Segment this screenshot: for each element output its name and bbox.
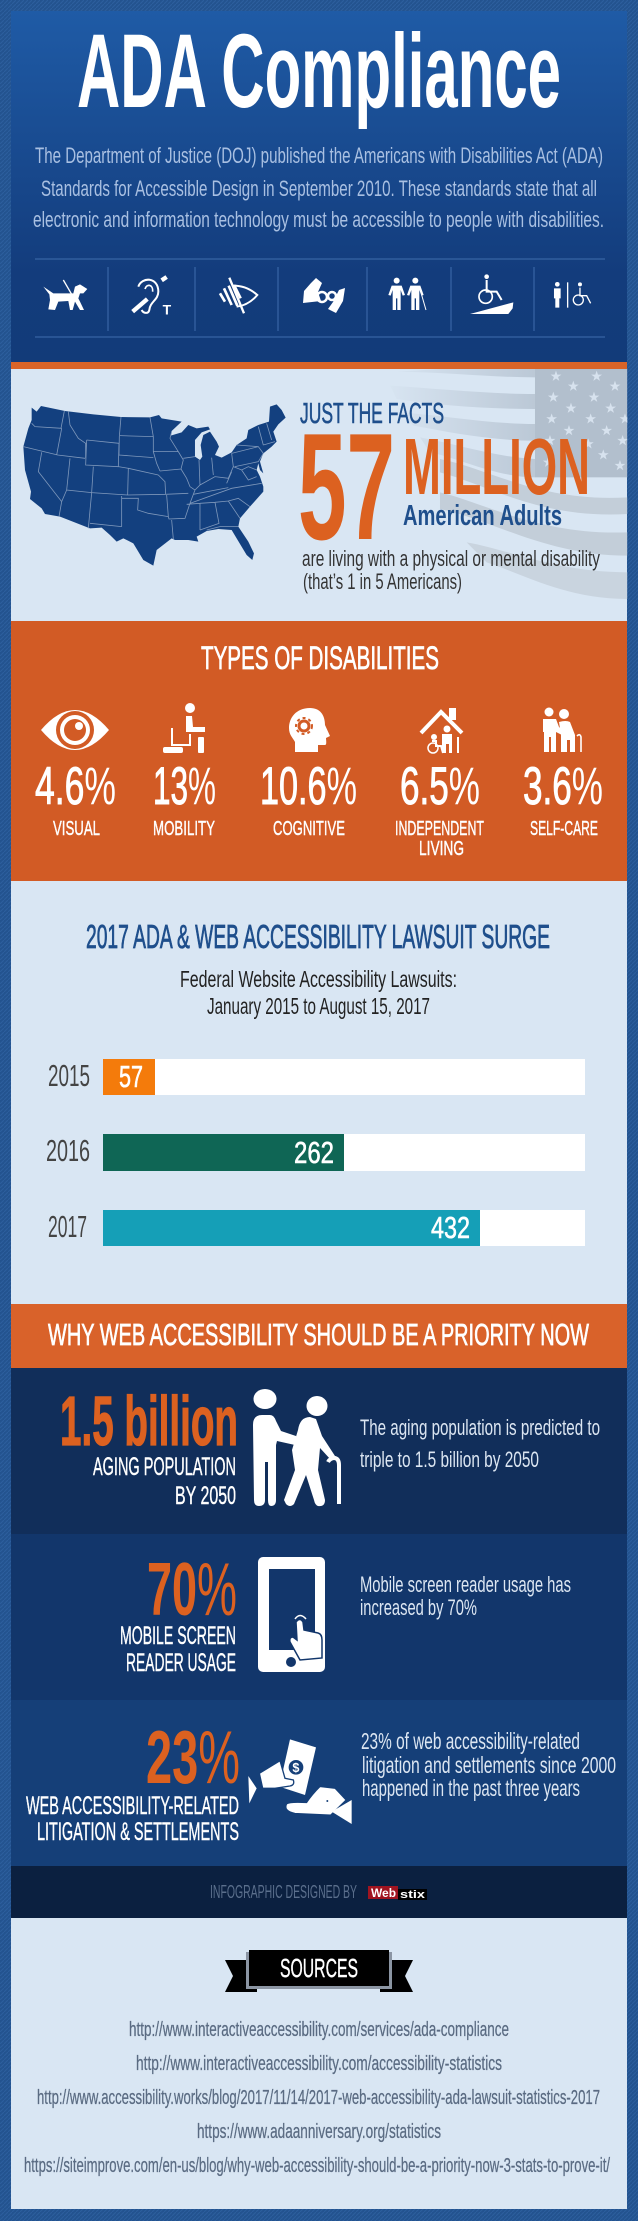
stat: 70%: [147, 1547, 237, 1631]
stat label: BY 2050: [175, 1482, 236, 1510]
item: mobility: MOBILITY: [153, 818, 215, 840]
stat label: [26, 1792, 239, 1846]
facts text: [302, 546, 600, 594]
credit bar: INFOGRAPHIC DESIGNED BY: [210, 1882, 357, 1902]
subheading: [180, 966, 457, 1019]
item: independent living: LIVING: [419, 838, 464, 860]
panel: sources: [11, 1918, 627, 2209]
stat label: LITIGATION & SETTLEMENTS: [37, 1818, 239, 1846]
stat label: READER USAGE: [126, 1649, 236, 1677]
item: visual: [35, 710, 116, 840]
icon: low vision eye: [220, 278, 257, 313]
panel: header: [11, 11, 627, 362]
stat: 23%: [146, 1715, 240, 1799]
panel: mobile screen reader: [11, 1534, 627, 1700]
panel: litigation and settlements: [11, 1700, 627, 1866]
bar chart: 2016: [46, 1133, 90, 1168]
description: [360, 1415, 600, 1472]
item: visual: 4.6%: [35, 757, 116, 816]
banner: why web accessibility: [11, 1304, 627, 1368]
icon: hearing loop: [133, 277, 172, 317]
icon: guide dog: [43, 280, 87, 310]
stat label: WEB ACCESSIBILITY-RELATED: [26, 1792, 239, 1820]
description: [361, 1728, 616, 1801]
subheading: January 2015 to August 15, 2017: [207, 993, 430, 1019]
stat label: [93, 1453, 236, 1510]
bar chart: 57: [119, 1059, 143, 1094]
stat label: MOBILE SCREEN: [120, 1622, 236, 1650]
item: cognitive: [260, 708, 357, 840]
icon: sign language: [303, 278, 345, 313]
map of the United States: [23, 404, 286, 566]
heading: just the facts: JUST THE FACTS: [300, 398, 444, 430]
description: triple to 1.5 billion by 2050: [360, 1447, 539, 1472]
heading: TYPES OF DISABILITIES: [201, 640, 439, 676]
description: increased by 70%: [360, 1595, 477, 1620]
big number: 57: 57: [298, 402, 395, 572]
item: mobility: [153, 703, 216, 840]
source links: [24, 2019, 610, 2177]
panel: types of disabilities: [11, 621, 627, 881]
american adults: American Adults: [403, 500, 562, 532]
icon: elderly people: [253, 1389, 339, 1506]
icon: phone with hand: [258, 1557, 325, 1672]
item: self-care: 3.6%: [523, 757, 603, 816]
facts text: (that’s 1 in 5 Americans): [303, 569, 462, 594]
intro text: [33, 143, 604, 232]
item: independent living: INDEPENDENT: [395, 818, 484, 840]
item: visual: VISUAL: [53, 818, 100, 840]
logo: webstix: stix: [400, 1889, 426, 1901]
panel: aging population: [11, 1368, 627, 1534]
stat: 1.5 billion: [60, 1382, 238, 1460]
source links: https://www.adaanniversary.org/statistics: [197, 2121, 441, 2143]
stat label: [120, 1622, 236, 1677]
bar chart: 2017: [48, 1209, 87, 1244]
logo: webstix: Web: [371, 1886, 396, 1900]
icon: elderly couple: [388, 278, 426, 310]
item: mobility: 13%: [153, 757, 216, 816]
icon: accessible restroom: [554, 282, 591, 308]
subheading: Federal Website Accessibility Lawsuits:: [180, 966, 457, 992]
item: cognitive: COGNITIVE: [273, 818, 345, 840]
credit bar: [11, 1866, 627, 1918]
banner: sources: [225, 1950, 413, 1992]
bar chart: [46, 1058, 585, 1246]
stat label: AGING POPULATION: [93, 1453, 236, 1481]
icon: wheelchair ramp: [470, 274, 513, 314]
icon: hearing loop: T: [163, 301, 172, 317]
item: self-care: [523, 708, 603, 840]
panel: lawsuit surge: [11, 881, 627, 1304]
item: independent living: [395, 708, 484, 860]
bar chart: 262: [294, 1135, 334, 1170]
banner: sources: SOURCES: [280, 1953, 358, 1983]
icon: money exchange: [248, 1739, 352, 1824]
item: cognitive: 10.6%: [260, 757, 357, 816]
flag background: [422, 369, 628, 599]
description: [360, 1572, 571, 1620]
bar chart: 432: [431, 1210, 470, 1245]
bar chart: 2015: [48, 1058, 90, 1093]
logo: webstix: [368, 1886, 427, 1901]
panel: just the facts: [11, 369, 630, 621]
icon: money exchange: $: [292, 1761, 299, 1775]
item: independent living: 6.5%: [400, 757, 480, 816]
